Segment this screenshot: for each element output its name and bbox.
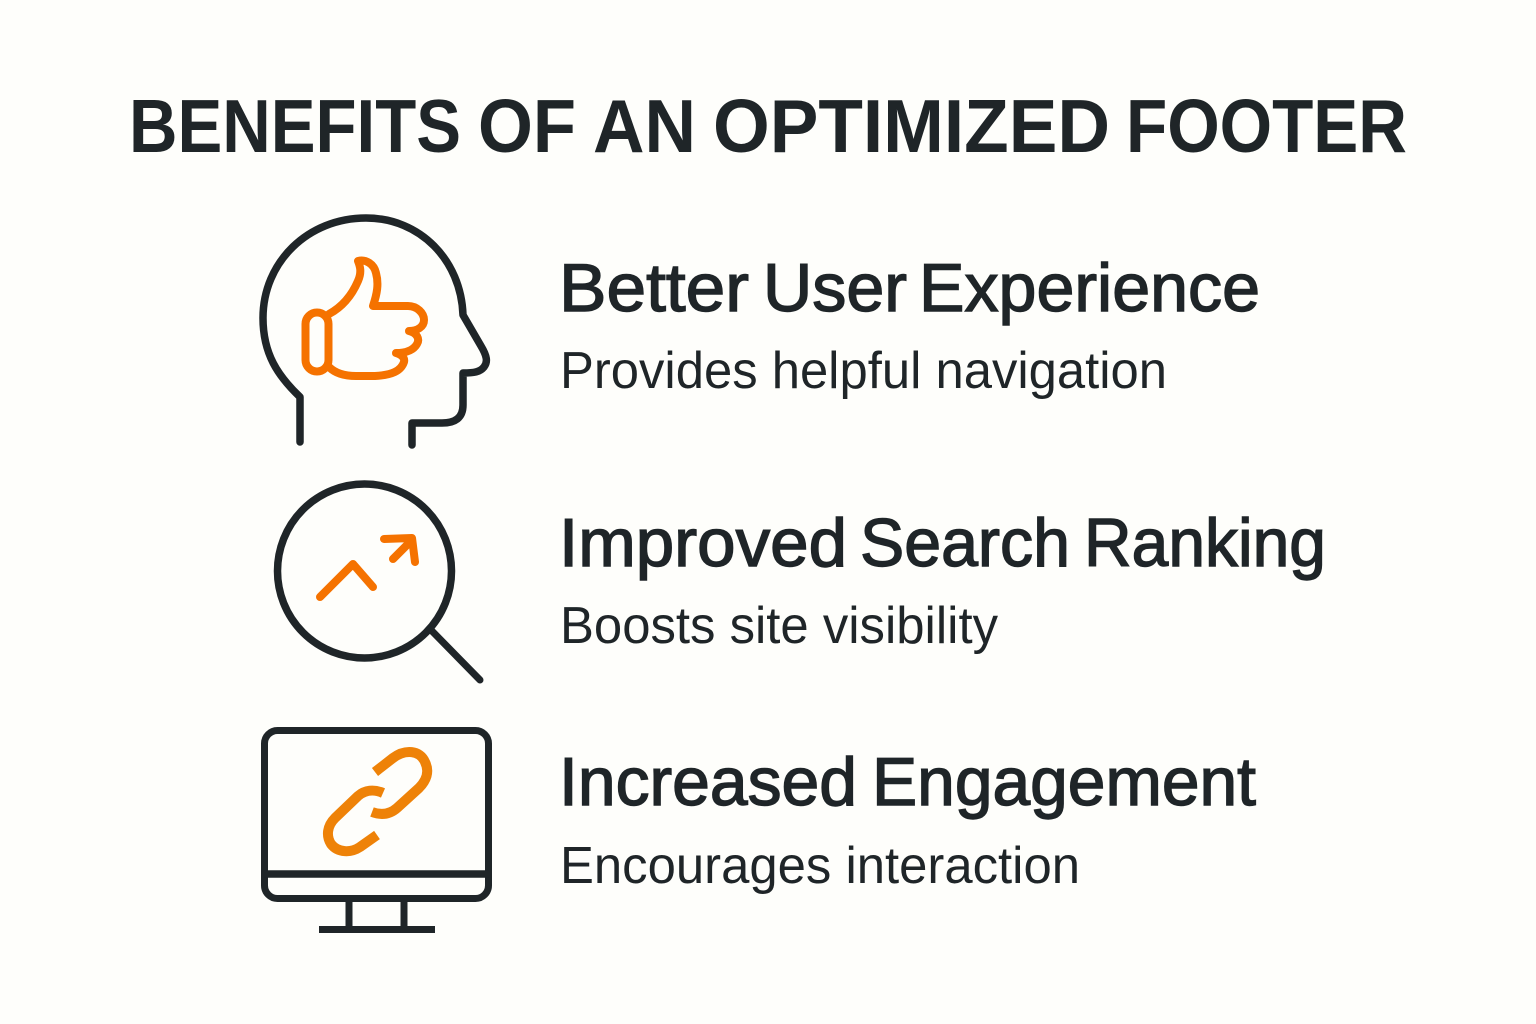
icon: head with thumbs up: [263, 218, 486, 445]
heading: increased engagement: Engagement: [872, 744, 1256, 820]
heading: improved search ranking: Improved: [559, 505, 847, 581]
title: OPTIMIZED: [713, 84, 1110, 168]
heading: increased engagement: Increased: [559, 744, 857, 820]
magnifier lens: [278, 484, 452, 658]
monitor frame: [264, 730, 488, 898]
heading: improved search ranking: Ranking: [1084, 505, 1326, 581]
text: provides helpful navigation: Provides helpful navigation: [560, 342, 1167, 400]
thumb and fist: [329, 261, 424, 376]
text: encourages interaction: Encourages interaction: [560, 837, 1080, 895]
title: OF: [478, 84, 576, 168]
icon: magnifier with upward arrow: [278, 484, 480, 680]
magnifier handle: [431, 630, 480, 680]
panel: better user experience: [263, 218, 1260, 445]
icon: monitor with chain link: [264, 730, 489, 930]
monitor divider: [264, 870, 489, 878]
monitor stand: [319, 902, 435, 930]
heading: better user experience: Better: [559, 250, 749, 326]
head outline: [263, 218, 486, 445]
heading: improved search ranking: Search: [860, 505, 1070, 581]
heading: better user experience: Experience: [919, 250, 1260, 326]
title: FOOTER: [1126, 84, 1407, 168]
heading: better user experience: User: [763, 250, 907, 326]
title: AN: [593, 84, 696, 168]
thumb cuff: [306, 312, 328, 372]
panel: improved search ranking: [278, 484, 1326, 680]
upward trend arrow: [320, 538, 415, 597]
panel: increased engagement: [264, 730, 1256, 930]
title: BENEFITS: [129, 84, 461, 168]
thumbs up: [306, 261, 424, 376]
text: boosts site visibility: Boosts site visibility: [560, 597, 998, 655]
chain link: [328, 752, 427, 851]
